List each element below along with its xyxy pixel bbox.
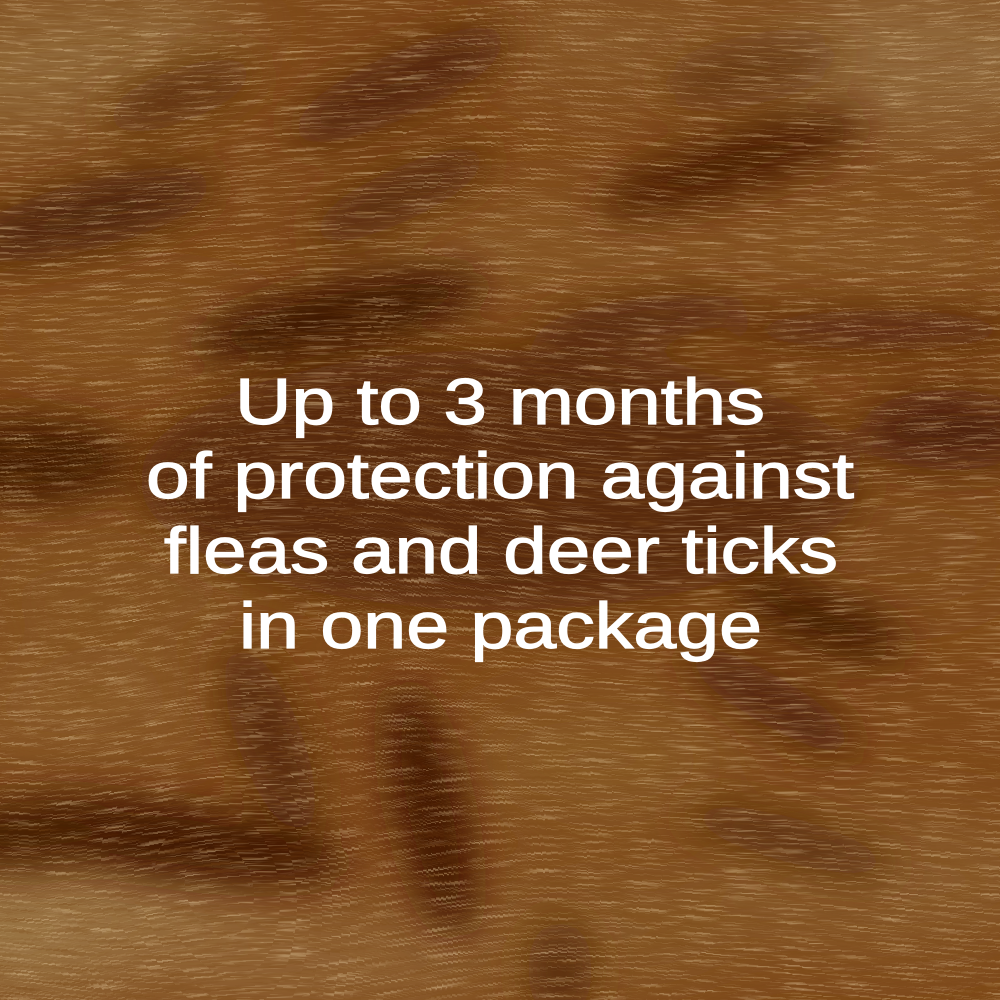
headline text: of protection against	[146, 439, 854, 512]
headline text: fleas and deer ticks	[164, 514, 838, 587]
headline text	[146, 365, 854, 662]
headline text: in one package	[239, 589, 762, 662]
headline text: Up to 3 months	[235, 365, 765, 438]
